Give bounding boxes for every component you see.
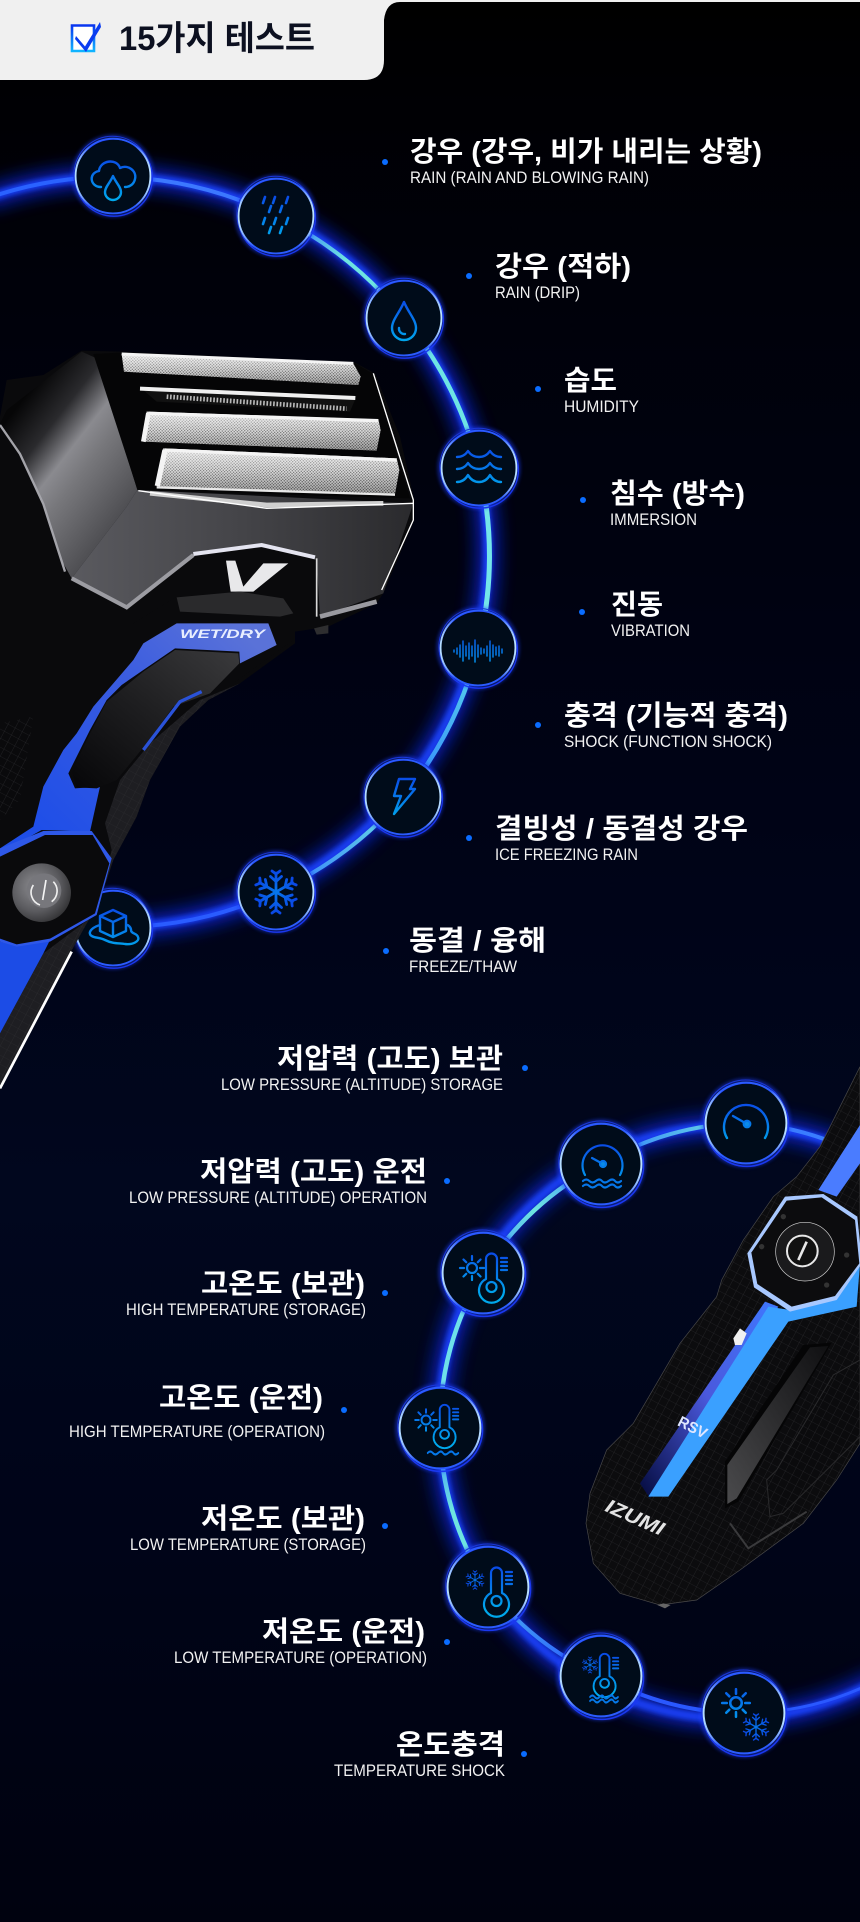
badge: high temp operation bbox=[397, 1385, 483, 1471]
label: temperature shock: TEMPERATURE SHOCK bbox=[334, 1761, 506, 1780]
label: drip bbox=[466, 251, 631, 302]
power button bbox=[0, 831, 112, 947]
label: low pressure operation: 저압력 (고도) 운전 bbox=[200, 1156, 427, 1187]
label: low pressure storage bbox=[221, 1043, 528, 1094]
texture band bbox=[0, 683, 240, 1090]
label: low pressure storage: 저압력 (고도) 보관 bbox=[277, 1043, 503, 1074]
header tab bbox=[0, 0, 860, 80]
label: freeze thaw: FREEZE/THAW bbox=[409, 957, 517, 976]
blue band bbox=[0, 623, 277, 853]
badge: high temp storage bbox=[440, 1230, 526, 1316]
label: immersion: IMMERSION bbox=[610, 510, 697, 529]
white edge bbox=[0, 952, 72, 1088]
label: low temperature operation: LOW TEMPERATURE (OPERATION) bbox=[174, 1648, 427, 1667]
power button bbox=[747, 1194, 860, 1312]
label: low temperature storage: LOW TEMPERATURE (STORAGE) bbox=[130, 1535, 366, 1554]
label: shock bbox=[535, 700, 788, 751]
label: low pressure storage: LOW PRESSURE (ALTITUDE) STORAGE bbox=[221, 1075, 503, 1094]
badge: low pressure operation gauge bbox=[558, 1121, 644, 1207]
label: drip: RAIN (DRIP) bbox=[495, 283, 580, 302]
body bbox=[586, 1067, 860, 1605]
label: freeze thaw bbox=[383, 925, 546, 976]
label: ice freezing rain: 결빙성 / 동결성 강우 bbox=[495, 813, 748, 844]
label: low temperature operation: 저온도 (운전) bbox=[262, 1616, 425, 1647]
label: temperature shock bbox=[334, 1729, 527, 1780]
label: high temperature storage: 고온도 (보관) bbox=[201, 1268, 365, 1299]
lower handle detail bbox=[0, 831, 112, 1088]
V logo bbox=[226, 561, 288, 592]
lower seam bbox=[730, 1512, 807, 1548]
foils bbox=[122, 354, 399, 495]
badge: snowflake bbox=[236, 852, 316, 932]
badge: shock bolt bbox=[364, 757, 442, 837]
label: low pressure operation bbox=[129, 1156, 450, 1207]
label: low temperature storage bbox=[130, 1503, 388, 1554]
badge: low pressure storage gauge bbox=[703, 1080, 789, 1166]
label: immersion bbox=[580, 478, 745, 529]
grey panel bbox=[727, 1346, 828, 1504]
label: low temperature storage: 저온도 (보관) bbox=[201, 1503, 365, 1534]
izumi logo: IZUMI bbox=[602, 1496, 668, 1541]
label: vibration bbox=[579, 589, 690, 640]
wet dry text: WET/DRY bbox=[180, 627, 267, 641]
badge: water drop bbox=[364, 278, 444, 358]
badge: immersion waves bbox=[440, 428, 518, 508]
nub bbox=[314, 625, 328, 635]
label: low temperature operation bbox=[174, 1616, 450, 1667]
label: ice freezing rain bbox=[466, 813, 748, 864]
rsv text: RSV bbox=[675, 1413, 711, 1443]
lower blue bbox=[0, 940, 50, 1033]
label: drip: 강우 (적하) bbox=[495, 251, 631, 282]
label: freeze thaw: 동결 / 융해 bbox=[409, 925, 546, 956]
label: shock: SHOCK (FUNCTION SHOCK) bbox=[564, 732, 772, 751]
shaver: bottom handle bbox=[586, 1067, 860, 1608]
light stripe bbox=[648, 1263, 860, 1497]
label: rain bbox=[382, 136, 762, 187]
icon: checkbox bbox=[72, 22, 101, 52]
chrome trim bbox=[0, 373, 413, 617]
side face bbox=[0, 352, 137, 578]
label: high temperature storage: HIGH TEMPERATURE (STORAGE) bbox=[126, 1300, 366, 1319]
label: high temperature storage bbox=[126, 1268, 388, 1319]
label: high temperature operation: 고온도 (운전) bbox=[159, 1382, 323, 1413]
slot bbox=[72, 650, 239, 788]
dark stripe bbox=[640, 1302, 778, 1498]
badge: vibration wave bbox=[438, 608, 518, 688]
badge: freeze thaw cube bbox=[74, 888, 152, 968]
label: rain: 강우 (강우, 비가 내리는 상황) bbox=[410, 136, 762, 167]
shaver: top head and handle bbox=[0, 351, 414, 1090]
label: high temperature operation: HIGH TEMPERATURE (OPERATION) bbox=[69, 1422, 325, 1441]
label: humidity: HUMIDITY bbox=[564, 397, 639, 416]
label: low pressure operation: LOW PRESSURE (ALTITUDE) OPERATION bbox=[129, 1188, 427, 1207]
foil tray bbox=[93, 353, 410, 498]
label: temperature shock: 온도충격 bbox=[396, 1729, 505, 1760]
badge: low temp storage bbox=[445, 1544, 531, 1630]
ring: upper arc bbox=[0, 177, 489, 927]
thin blue edge bbox=[143, 692, 202, 750]
label: ice freezing rain: ICE FREEZING RAIN bbox=[495, 845, 638, 864]
label: shock: 충격 (기능적 충격) bbox=[564, 700, 788, 731]
badge: drizzle bbox=[236, 176, 316, 256]
nub bbox=[657, 1603, 671, 1608]
slot frame bbox=[725, 1343, 832, 1508]
heading: 15가지 테스트 bbox=[119, 20, 315, 58]
badge: rain and blowing rain bbox=[74, 136, 152, 216]
left texture bbox=[0, 717, 33, 820]
label: vibration: 진동 bbox=[611, 589, 663, 620]
upper blue bbox=[818, 1125, 860, 1197]
badge: low temp operation bbox=[558, 1633, 644, 1719]
ring: lower arc bbox=[440, 1123, 860, 1719]
neck bbox=[133, 592, 293, 683]
label: vibration: VIBRATION bbox=[611, 621, 690, 640]
front face bbox=[72, 490, 413, 617]
silhouette bbox=[0, 351, 414, 1090]
label: humidity: 습도 bbox=[564, 365, 617, 396]
badge: temperature shock bbox=[701, 1670, 787, 1756]
label: immersion: 침수 (방수) bbox=[610, 478, 745, 509]
label: high temperature operation bbox=[69, 1382, 347, 1441]
label: humidity bbox=[535, 365, 639, 416]
icon: symbol on strip bbox=[733, 1328, 747, 1345]
right panel bbox=[767, 1360, 860, 1517]
label: rain: RAIN (RAIN AND BLOWING RAIN) bbox=[410, 168, 649, 187]
